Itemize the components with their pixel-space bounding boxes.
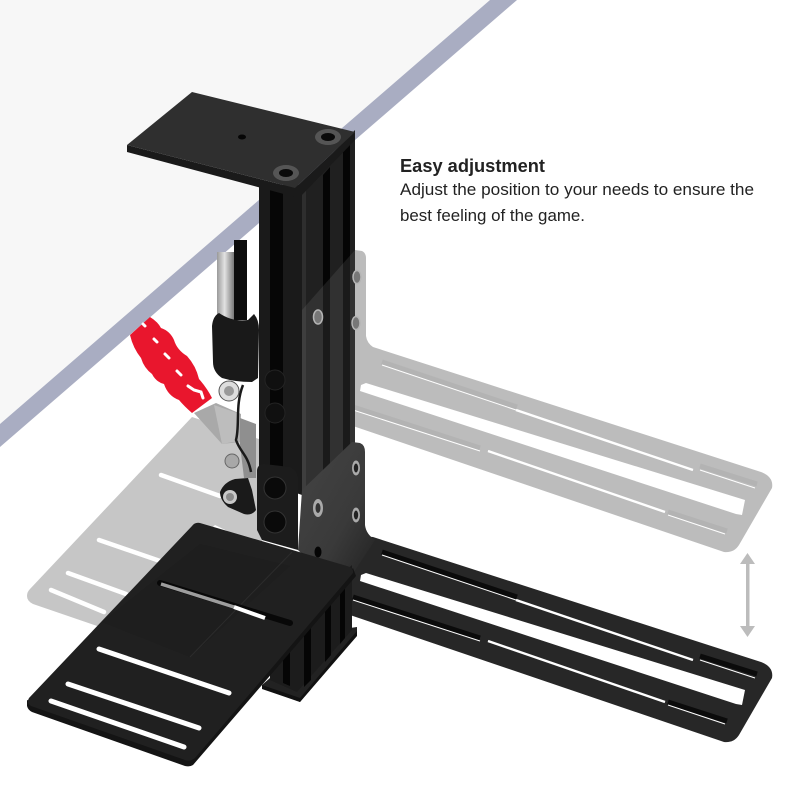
ghost screws on upper bracket (314, 270, 361, 330)
ghost screws on column side (265, 370, 285, 423)
clamp mechanism: black sleeve, metal latch, bolts (194, 313, 259, 514)
heading: Easy adjustment (400, 156, 545, 176)
column: aluminium extrusion with grooves (259, 130, 355, 495)
description text (400, 181, 754, 225)
black arm: right arm at lower position with slots (350, 535, 772, 742)
description text: Adjust the position to your needs to ensure the (400, 181, 754, 199)
desk: table top with blue-grey edge (0, 0, 517, 447)
clamp rod: steel and black shafts (217, 240, 247, 320)
description text: best feeling of the game. (400, 207, 585, 225)
top mounting plate with screws (127, 92, 355, 197)
ghost arm: faded raised right arm with slots (350, 250, 772, 552)
column foot below plate (262, 565, 357, 702)
ghost outline through plate (102, 544, 290, 657)
ghost bracket seen through column (302, 250, 355, 495)
black plate: left plate at lower position with slots (27, 523, 356, 766)
ghost plate: faded raised left plate (27, 417, 262, 628)
red handle (130, 317, 212, 413)
arrow: vertical double-headed adjustment arrow (740, 553, 755, 637)
left lower bracket with bolts (257, 464, 298, 550)
right lower bracket with screws (298, 442, 375, 578)
